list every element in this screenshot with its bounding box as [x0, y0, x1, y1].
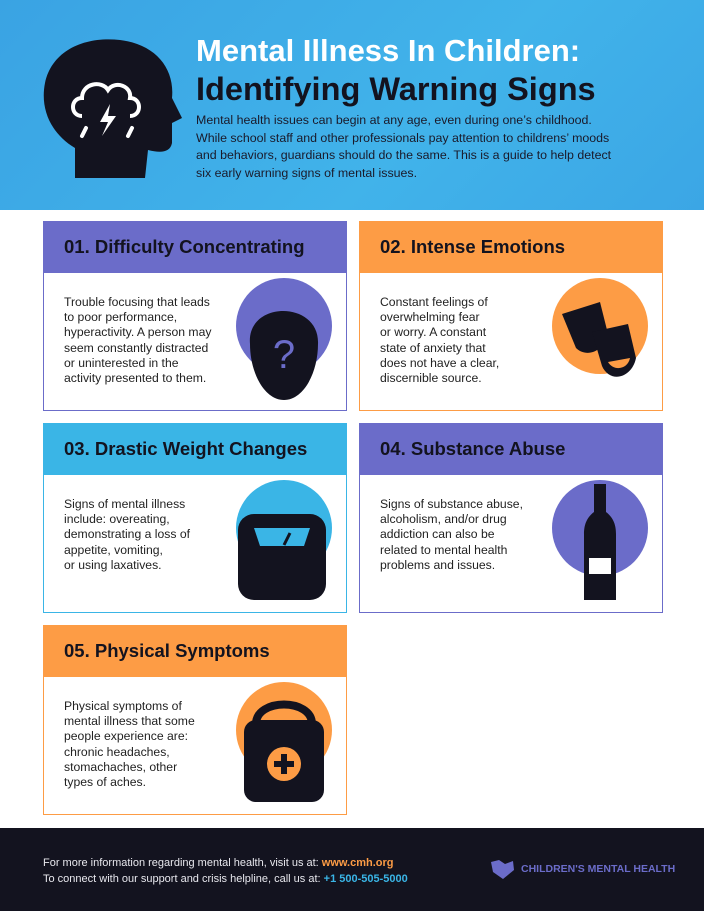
text: does not have a clear,: [380, 356, 499, 370]
heading: 05. Physical Symptoms: [64, 640, 270, 661]
heading: [44, 626, 346, 677]
title: Identifying Warning Signs: [196, 71, 596, 107]
footer contact text: [43, 857, 408, 885]
text: Constant feelings of: [380, 295, 488, 309]
text: overwhelming fear: [380, 310, 480, 324]
icon: handshake: [491, 860, 514, 879]
text: stomachaches, other: [64, 760, 177, 774]
intro text: six early warning signs of mental issues.: [196, 166, 417, 180]
text: related to mental health: [380, 543, 507, 557]
text: chronic headaches,: [64, 745, 170, 759]
heading: [44, 222, 346, 273]
text: problems and issues.: [380, 558, 495, 572]
text: discernible source.: [380, 371, 482, 385]
text: [64, 497, 190, 572]
heading: 01. Difficulty Concentrating: [64, 236, 305, 257]
text: activity presented to them.: [64, 371, 206, 385]
footer contact text: To connect with our support and crisis helpline, call us at: +1 500-505-5000: [43, 873, 408, 885]
text: alcoholism, and/or drug: [380, 512, 507, 526]
icon: theatre masks: [552, 278, 648, 377]
heading: [44, 424, 346, 475]
icon: bottle: [552, 480, 648, 600]
text: people experience are:: [64, 729, 188, 743]
icon: head with question mark: ?: [273, 333, 295, 377]
text: Trouble focusing that leads: [64, 295, 210, 309]
panel: 05 physical symptoms: [43, 625, 347, 815]
panel: 04 substance abuse: [359, 423, 663, 613]
panel: 02 intense emotions: [359, 221, 663, 411]
text: Signs of mental illness: [64, 497, 185, 511]
footer: [0, 828, 704, 911]
icon: first aid bag: [236, 682, 332, 802]
text: mental illness that some: [64, 714, 195, 728]
text: include: overeating,: [64, 512, 170, 526]
heading: 04. Substance Abuse: [380, 438, 565, 459]
icon: head with question mark: [236, 278, 332, 400]
logo: [491, 860, 675, 879]
text: state of anxiety that: [380, 341, 486, 355]
intro text: and behaviors, guardians should do the same. This is a guide to help detect: [196, 148, 611, 162]
panel: 03 weight changes: [43, 423, 347, 613]
text: [380, 295, 499, 385]
text: or uninterested in the: [64, 356, 179, 370]
text: [64, 295, 212, 385]
icon: head with storm cloud: [44, 39, 182, 178]
header banner: [0, 0, 704, 210]
footer contact text: For more information regarding mental health, visit us at: www.cmh.org: [43, 857, 394, 869]
text: demonstrating a loss of: [64, 527, 190, 541]
title: Mental Illness In Children:: [196, 33, 580, 68]
text: hyperactivity. A person may: [64, 325, 211, 339]
text: seem constantly distracted: [64, 341, 208, 355]
text: or worry. A constant: [380, 325, 486, 339]
heading: 03. Drastic Weight Changes: [64, 438, 307, 459]
icon: scale: [236, 480, 332, 600]
logo: CHILDREN'S MENTAL HEALTH: [521, 863, 675, 875]
intro text: While school staff and other professionals pay attention to childrens’ moods: [196, 130, 609, 144]
text: Signs of substance abuse,: [380, 497, 523, 511]
text: [64, 699, 195, 789]
text: [380, 497, 523, 572]
text: to poor performance,: [64, 310, 177, 324]
heading: [360, 222, 662, 273]
heading: 02. Intense Emotions: [380, 236, 565, 257]
text: appetite, vomiting,: [64, 543, 163, 557]
text: Physical symptoms of: [64, 699, 182, 713]
panel: 01 difficulty concentrating: [43, 221, 347, 411]
text: or using laxatives.: [64, 558, 162, 572]
text: types of aches.: [64, 775, 146, 789]
intro text: Mental health issues can begin at any age, even during one’s childhood.: [196, 113, 592, 127]
intro text: [196, 113, 611, 180]
text: addiction can also be: [380, 527, 495, 541]
title: [196, 33, 596, 107]
heading: [360, 424, 662, 475]
